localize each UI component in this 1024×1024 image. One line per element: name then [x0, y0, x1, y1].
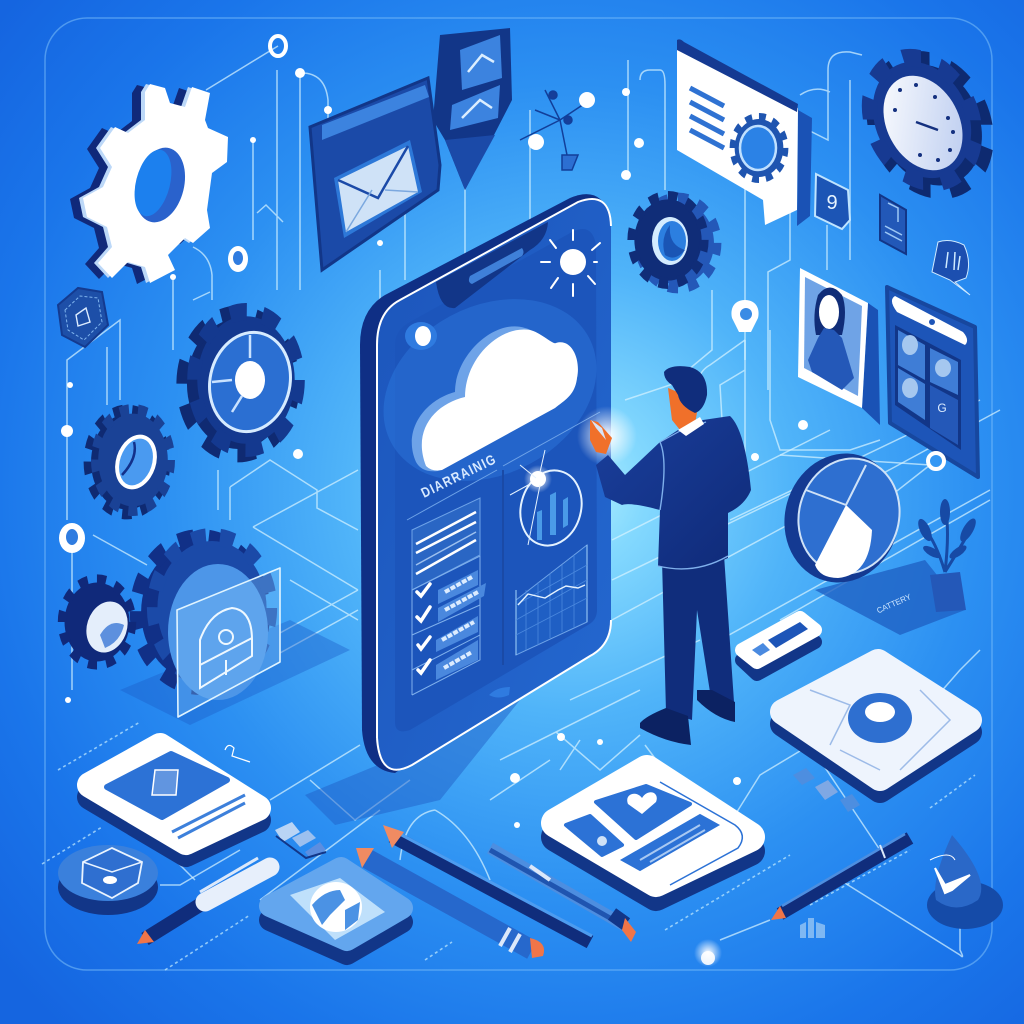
jacket: [596, 416, 751, 569]
icon: bar cluster: [800, 918, 825, 938]
icon: right pencil: [771, 834, 910, 920]
icon: number tile: 9: [826, 192, 838, 214]
panel: phone: [305, 194, 628, 825]
phone camera: [405, 322, 437, 350]
panel: image cards and funnel: [433, 28, 512, 190]
panel: settings window: [677, 39, 812, 226]
dashboard heading: DIARRAINIG: [418, 450, 499, 501]
checklist: [412, 556, 486, 695]
figure: man: [577, 366, 751, 745]
icon: blue pencil: [356, 848, 544, 958]
panel: envelope window: [310, 78, 440, 270]
icon: medium gear with dial: [183, 312, 300, 453]
icon: floor mat with caption: [815, 560, 965, 635]
icon: pen left: [137, 858, 270, 944]
legs: [640, 555, 735, 745]
icon: dark pencil: [383, 825, 592, 942]
hand: [590, 420, 612, 454]
chart: bars in ring: [510, 450, 590, 552]
icon: sun: [541, 230, 600, 296]
icon: small dark gear: [632, 197, 716, 288]
phone notch: [436, 222, 548, 308]
glowing nodes: [61, 68, 808, 965]
chart: pie disc: [770, 440, 914, 596]
icon: large white gear: [70, 84, 228, 284]
icon: silver pen: [490, 848, 636, 942]
icon: dark badge left: [58, 288, 108, 347]
icon: document: [880, 195, 906, 254]
head: [664, 366, 707, 436]
icon: globe gear: [62, 580, 134, 664]
icon: molecule network: [520, 90, 595, 170]
icon: floor mat with caption: CATTERY: [875, 592, 913, 615]
icon: ring node right: [928, 453, 944, 469]
icon: ring pin left: [59, 523, 85, 553]
chart: line chart: [516, 545, 587, 655]
text lines box: [412, 498, 480, 590]
icon: potted plant: [915, 499, 979, 612]
icon: grey blocks left: [275, 822, 326, 858]
icon: small white card: [742, 618, 815, 674]
icon: ring top left: [270, 36, 286, 56]
icon: shield cylinder: [58, 845, 158, 915]
panel: message card: [90, 745, 258, 854]
icon: number tile: [815, 174, 850, 229]
panel: app tablet: [887, 287, 978, 477]
panel: app tablet: G: [937, 401, 947, 415]
icon: cloud: [412, 326, 578, 471]
panel: heart card: [556, 770, 750, 896]
icon: chat bubble: [932, 241, 970, 295]
icon: small gear ring: [89, 410, 170, 513]
phone speaker: [469, 248, 524, 284]
icon: location pin left: [228, 246, 248, 272]
panel: portrait card: [798, 268, 880, 425]
icon: small grey blocks right: [793, 768, 860, 812]
dotted traces: [42, 722, 975, 970]
home button: [489, 687, 510, 698]
icon: globe card: [270, 868, 402, 954]
icon: large lower gear with glass panel: [120, 537, 350, 725]
icon: location pin right: [731, 300, 759, 332]
icon: glowing bottom node: [694, 939, 722, 967]
icon: clock gear: [850, 41, 1006, 208]
panel: map card: [783, 662, 969, 790]
icon: mail drop: [927, 835, 1003, 929]
